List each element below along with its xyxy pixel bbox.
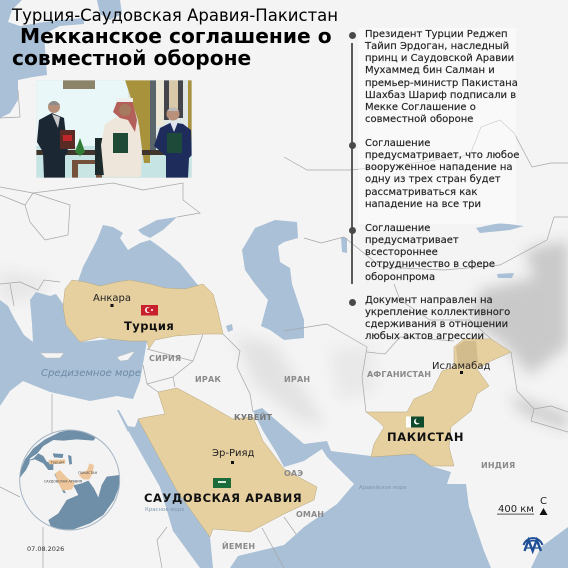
date: 07.08.2026 [27,545,64,553]
man centre [101,117,142,177]
logo: AA [524,538,542,551]
man right [154,122,192,178]
text panel backing [358,28,516,224]
bullet 2 [349,138,519,210]
text: Президент Турции Реджеп Тайип Эрдоган, наследный принц и Саудовской Аравии Мухаммед бин Салман и премьер-министр Пакистана Шахбаз Шариф подписали в Мекке Соглашение о совместной обороне [365,29,518,125]
label: Arabian Sea: Аравийское море [359,484,406,491]
text: Соглашение предусматривает всестороннее сотрудничество в сфере оборонпрома [365,223,495,283]
label: Iraq: ИРАК [195,375,221,384]
label: Riyadh: Эр-Рияд [212,448,254,459]
flag: Turkey [141,305,158,316]
main title: совместной обороне [12,46,251,70]
label: Saudi Arabia: САУДОВСКАЯ АРАВИЯ [144,491,302,505]
label: Afghanistan: АФГАНИСТАН [367,370,431,379]
region: Kashmir shading [456,341,478,368]
bullet 3 [349,223,495,283]
label: Pakistan: ПАКИСТАН [387,430,464,444]
label: India: ИНДИЯ [481,461,515,470]
label: Ankara: Анкара [93,293,131,304]
text: Соглашение предусматривает, что любое вооруженное нападение на одну из трех стран будет рассматриваться как нападение на все три [365,138,519,210]
inset globe: САУДОВСКАЯ АРАВИЯ [44,479,82,483]
label: Red Sea: Красное море [145,507,185,513]
scale bar: 400 км [498,504,534,515]
country: Pakistan [366,339,511,466]
main title: Мекканское соглашение о [20,24,332,48]
label: Oman: ОМАН [296,510,324,519]
globe: highlighted countries [48,459,94,491]
inset globe: ПАКИСТАН [78,471,98,475]
label: Iran: ИРАН [284,375,310,384]
subtitle: Турция-Саудовская Аравия-Пакистан [12,6,338,25]
country: Saudi Arabia [138,388,317,537]
label: Turkey: Турция [124,319,174,333]
inset globe [20,430,120,530]
photo: signing ceremony [36,80,192,178]
flag: Pakistan [406,416,424,428]
label: Islamabad: Исламабад [432,361,490,372]
north arrow [540,496,548,515]
label: UAE: ОАЭ [284,469,303,478]
north arrow: С [540,496,547,507]
label: Syria: СИРИЯ [149,354,181,363]
bullet 4 [349,295,510,342]
country: Turkey [63,280,223,349]
flag: Saudi Arabia [213,478,231,488]
inset globe: Турция [50,460,64,464]
man left [37,113,68,178]
label: Riyadh [212,448,254,464]
terrain shading [0,240,568,430]
text: Документ направлен на укрепление коллективного сдерживания в отношении любых актов агрессии [365,295,510,342]
main title [12,24,332,70]
label: Yemen: ЙЕМЕН [222,540,255,551]
timeline line [351,43,352,284]
label: Mediterranean Sea: Средиземное море [41,368,141,379]
label: Kuwait: КУВЕЙТ [234,411,272,422]
bullet 1 [349,29,518,125]
islands [40,351,135,361]
